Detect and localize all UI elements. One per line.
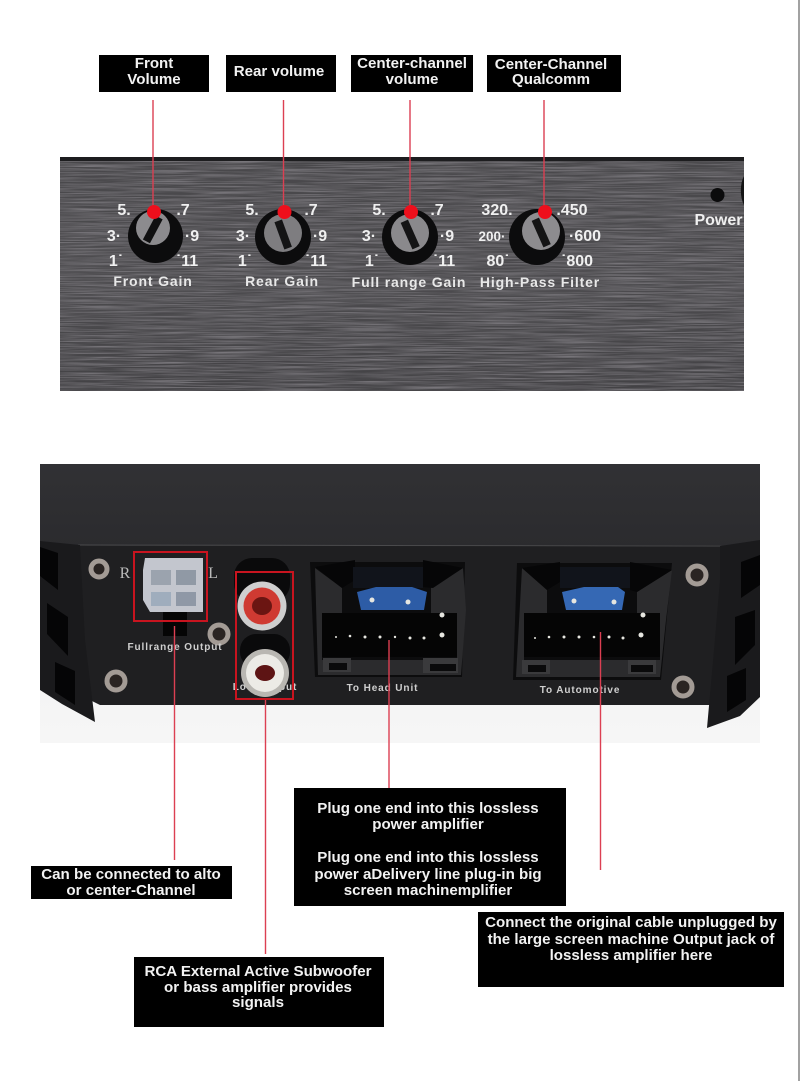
label: Front Volume: Volume xyxy=(127,71,181,88)
screws xyxy=(91,561,706,696)
label: RCA subwoofer: or bass amplifier provides xyxy=(164,979,352,996)
knob: High-Pass Filter: 200· xyxy=(478,229,506,244)
label: Center-Channel Qualcomm xyxy=(487,55,621,92)
knob: High-Pass Filter: High-Pass Filter xyxy=(480,274,600,290)
knob: Front Gain: 5. xyxy=(117,202,131,219)
amplifier front plate xyxy=(78,545,722,705)
knob: Full range Gain: ˙11 xyxy=(433,253,455,270)
knob: High-Pass Filter: 80˙ xyxy=(486,253,510,270)
label: head unit instructions xyxy=(294,788,566,906)
knob: High-Pass Filter: 320. xyxy=(481,202,513,219)
label: head unit instructions: power amplifier xyxy=(372,816,484,833)
silkscreen labels: Fullrange Output xyxy=(128,642,222,653)
red highlight box: fullrange output xyxy=(134,552,207,621)
connector: To Automotive xyxy=(513,562,672,680)
knob: Front Gain: .7 xyxy=(176,202,190,219)
label: original cable instructions: the large screen machine Output jack of xyxy=(488,931,775,948)
knob: Rear Gain: ˙11 xyxy=(305,253,327,270)
power indicator xyxy=(694,176,744,229)
label: Front Volume: Front xyxy=(135,55,173,72)
knob: Full range Gain: 5. xyxy=(372,202,386,219)
silkscreen labels: Low Output xyxy=(233,682,297,693)
label: Center-Channel Qualcomm: Center-Channel xyxy=(495,56,607,73)
label: head unit instructions: Plug one end into this lossless xyxy=(317,800,539,817)
knob: Full range Gain: 3· xyxy=(362,228,376,245)
label: head unit instructions: screen machinemplifier xyxy=(344,882,512,899)
label: Center-channel volume: Center-channel xyxy=(357,55,467,72)
label: Center-channel volume: volume xyxy=(386,71,438,88)
knob: Rear Gain: Rear Gain xyxy=(245,273,319,289)
label: RCA subwoofer: RCA External Active Subwoofer xyxy=(144,963,372,980)
connector: RCA jacks xyxy=(234,558,290,697)
silkscreen labels: R xyxy=(120,565,131,582)
knob: Front Gain: ˙11 xyxy=(176,253,198,270)
label: original cable instructions: Connect the original cable unplugged by xyxy=(485,914,778,931)
label: alto or center-channel: Can be connected to alto xyxy=(41,866,221,883)
knob: Front Gain: 3· xyxy=(107,228,121,245)
label: original cable instructions xyxy=(478,912,784,987)
panel: gain control photo xyxy=(60,157,744,391)
knob: Rear Gain: .7 xyxy=(304,202,318,219)
red marker dots xyxy=(147,205,552,219)
knob: High-Pass Filter xyxy=(478,202,601,290)
knob: Rear Gain: 1˙ xyxy=(238,253,252,270)
knob: High-Pass Filter: ·600 xyxy=(569,228,601,245)
knob: Full range Gain: ·9 xyxy=(440,228,454,245)
red leader lines: top labels xyxy=(153,100,544,206)
label: Center-Channel Qualcomm: Qualcomm xyxy=(512,71,590,88)
label: head unit instructions: Plug one end into this lossless xyxy=(317,849,539,866)
label: Rear volume xyxy=(226,55,336,92)
knob: Full range Gain: .7 xyxy=(430,202,444,219)
label: Rear volume: Rear volume xyxy=(234,63,324,80)
connector: fullrange output xyxy=(143,558,203,636)
right side bracket xyxy=(707,540,760,728)
knob: Front Gain xyxy=(107,202,199,289)
knob: High-Pass Filter: ˙800 xyxy=(561,253,593,270)
knob: Rear Gain: ·9 xyxy=(313,228,327,245)
connector: To Head Unit xyxy=(310,560,466,677)
knob: Front Gain: 1˙ xyxy=(109,253,123,270)
label: head unit instructions: power aDelivery line plug-in big xyxy=(314,866,542,883)
label: alto or center-channel: or center-Channel xyxy=(66,882,196,899)
knob: Rear Gain: 5. xyxy=(245,202,259,219)
label: Front Volume xyxy=(99,55,209,92)
red highlight box: RCA jacks xyxy=(236,572,293,699)
knob: High-Pass Filter: .450 xyxy=(556,202,588,219)
knob: Front Gain: ·9 xyxy=(185,228,199,245)
panel: rear connector photo xyxy=(40,464,760,743)
knob: Full range Gain: Full range Gain xyxy=(352,274,466,290)
knob: Full range Gain xyxy=(352,202,466,290)
silkscreen labels: L xyxy=(208,565,218,582)
power indicator: Power xyxy=(694,212,743,229)
label: alto or center-channel xyxy=(31,866,232,899)
label: RCA subwoofer xyxy=(134,957,384,1027)
silkscreen labels: To Head Unit xyxy=(347,683,418,694)
knob: Full range Gain: 1˙ xyxy=(365,253,379,270)
silkscreen labels xyxy=(120,565,620,696)
left side bracket xyxy=(40,541,95,722)
knob: Front Gain: Front Gain xyxy=(113,273,193,289)
knob: Rear Gain xyxy=(236,202,327,289)
label: Center-channel volume xyxy=(351,55,473,92)
label: original cable instructions: lossless amplifier here xyxy=(550,947,712,964)
red leader lines: bottom labels xyxy=(174,626,600,954)
silkscreen labels: To Automotive xyxy=(540,685,620,696)
amplifier top face xyxy=(40,464,760,547)
knob: Rear Gain: 3· xyxy=(236,228,250,245)
right edge strip xyxy=(798,0,800,1081)
label: RCA subwoofer: signals xyxy=(232,994,284,1011)
